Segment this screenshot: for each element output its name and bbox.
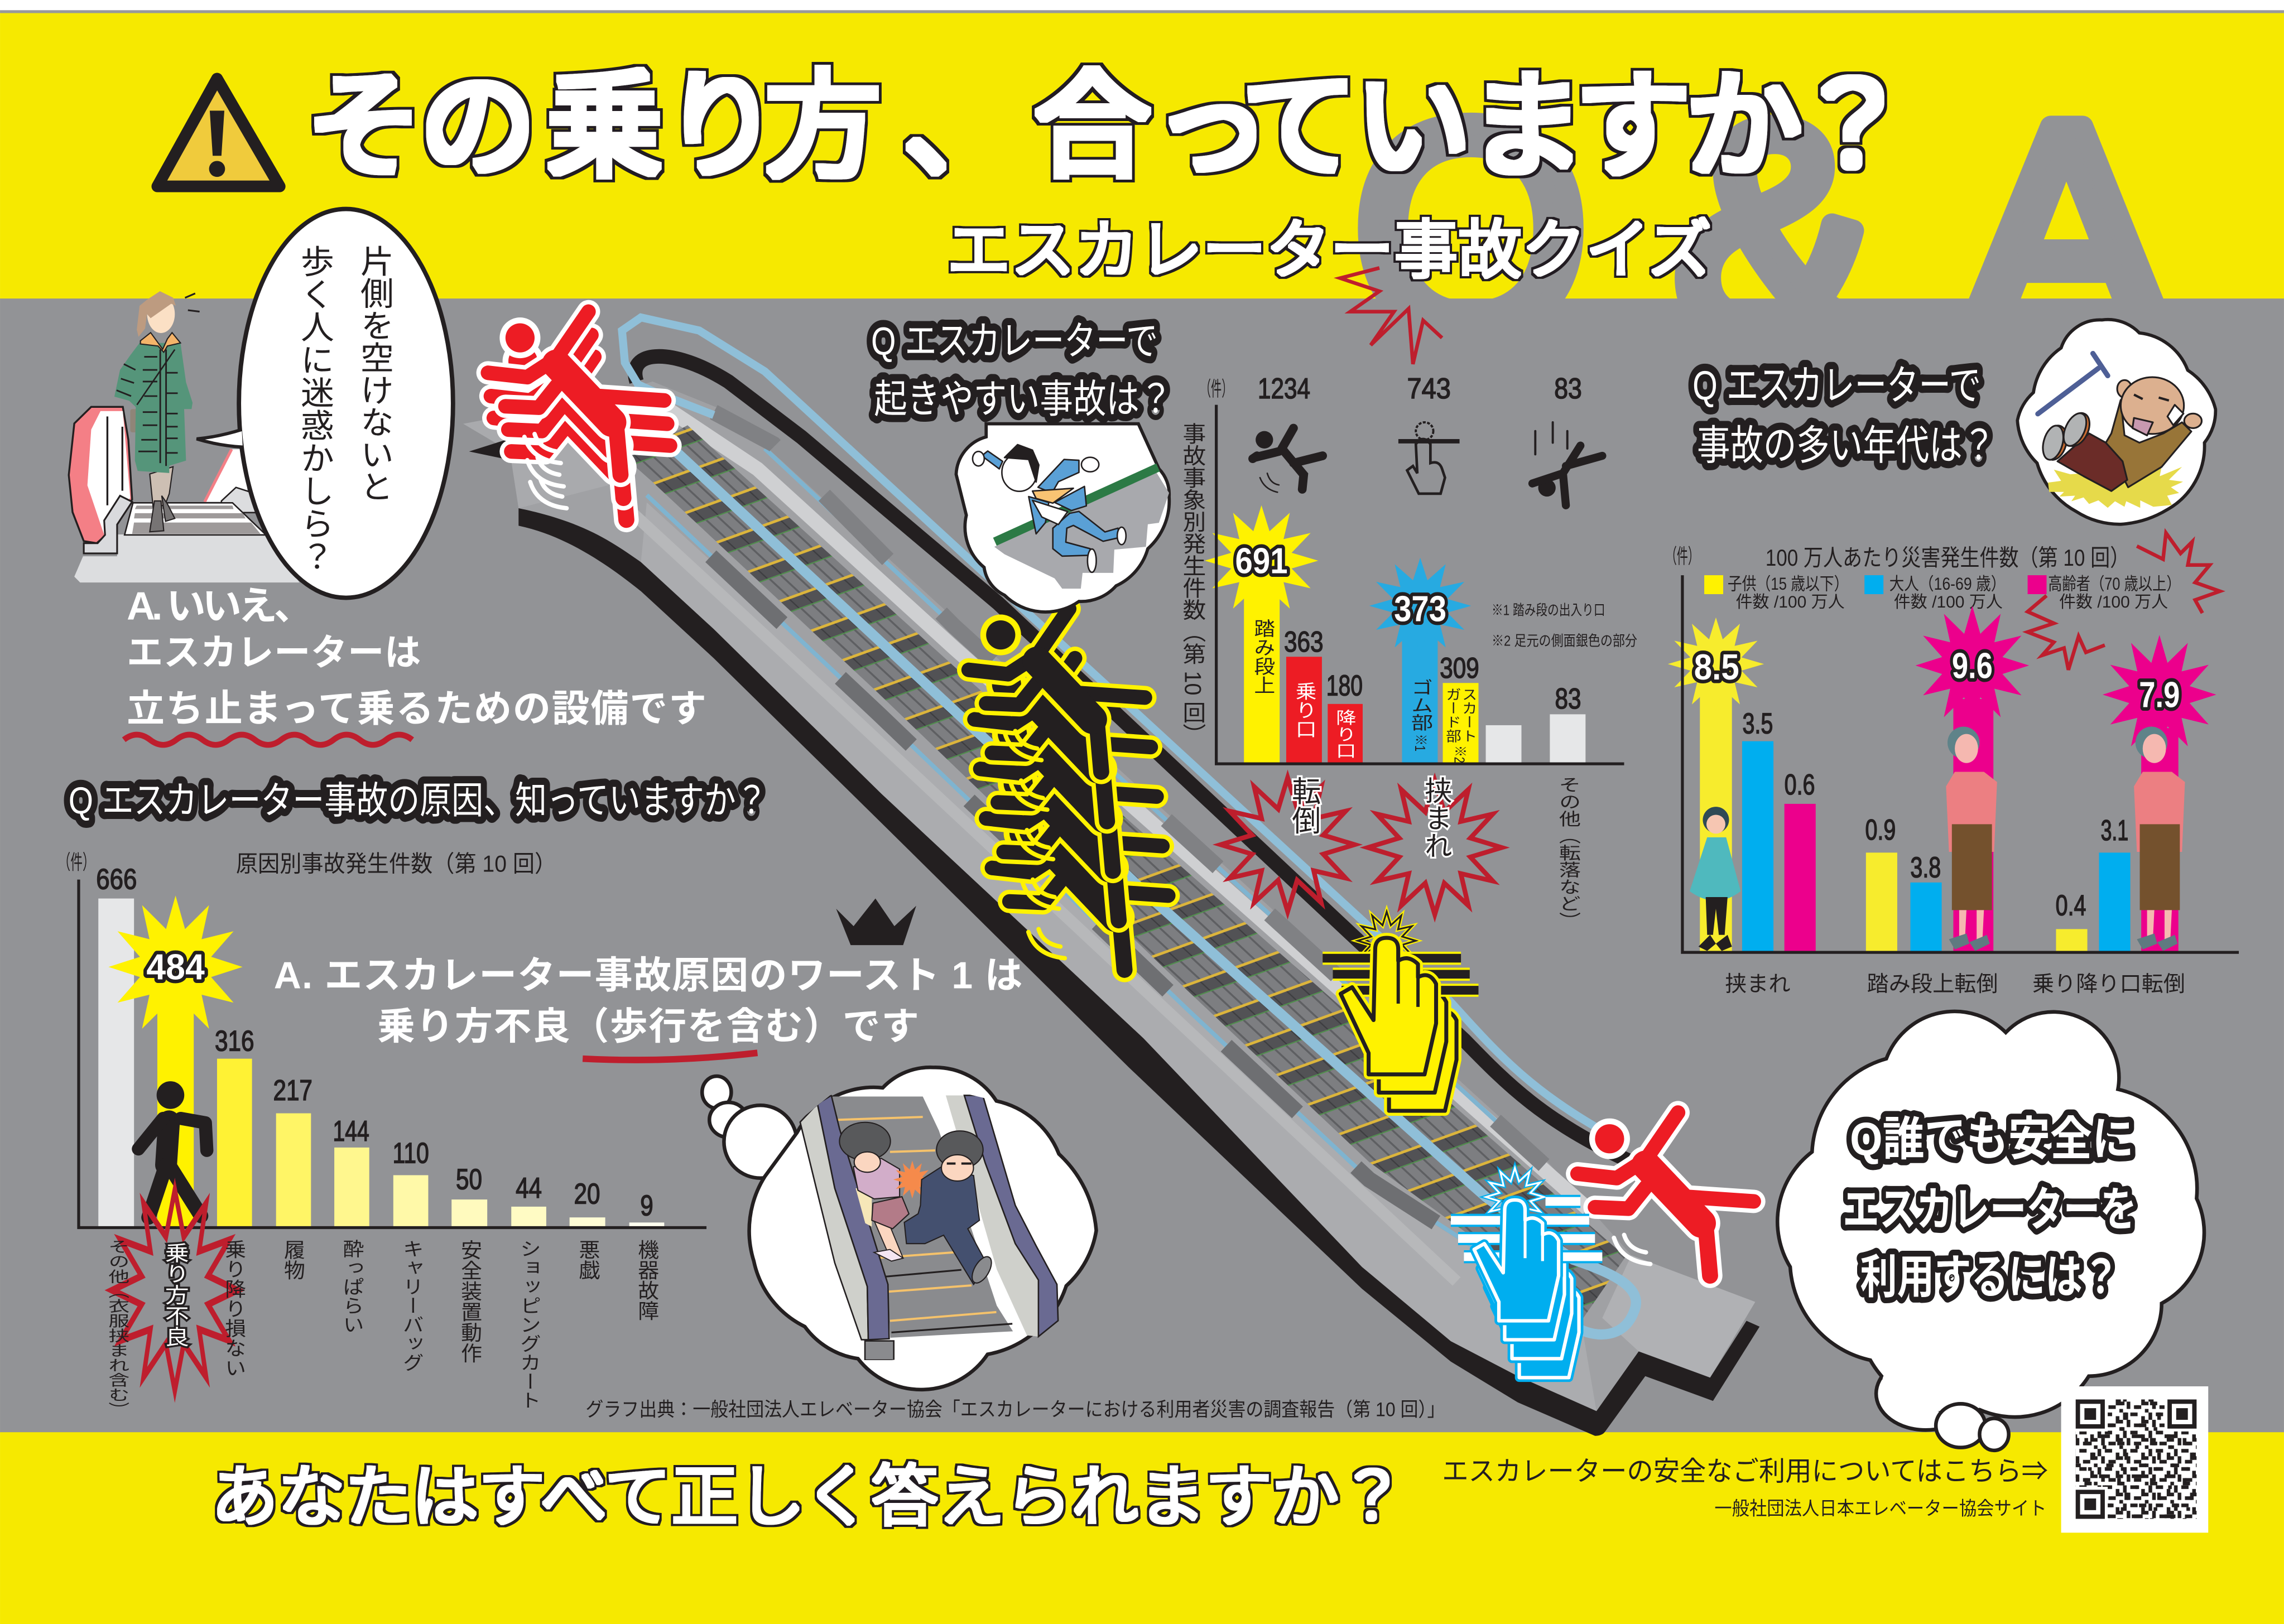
icon: crown: [836, 899, 916, 945]
footer link text: 一般社団法人日本エレベーター協会サイト: [1714, 1498, 2046, 1519]
bar values: 3.8: [1910, 852, 1941, 884]
red burst right top: [2137, 533, 2220, 613]
vertical title: 事故事象別発生件数（第 10 回）: [1180, 422, 1206, 745]
footer link text: [1442, 1457, 2048, 1519]
axes: [79, 880, 706, 1227]
boots: [150, 496, 175, 532]
title: その乗り方、合っていますか？: [306, 62, 1911, 192]
speech tail: [196, 430, 243, 447]
coat lines: [117, 349, 177, 466]
bar values: 0.6: [1785, 769, 1815, 801]
category labels: 挟まれ: [1421, 776, 1452, 859]
far balustrade: [205, 449, 249, 502]
bar inner labels: ※2: [1451, 745, 1468, 763]
thought bubble: walking on escalator: [702, 1067, 1097, 1390]
impact star: [2048, 467, 2183, 508]
far newel: [222, 488, 270, 513]
value 7.9: 7.9: [2139, 674, 2180, 715]
bar chart: accident types: [1180, 373, 1637, 929]
subtitle: エスカレーター事故クイズ: [947, 215, 1711, 286]
bar inner labels: 乗り口: [1292, 682, 1316, 738]
illustration: woman at escalator entrance: [69, 291, 300, 582]
question heading: common accidents: Q エスカレーターで: [871, 319, 1158, 363]
values: [96, 864, 653, 1222]
axes: [1682, 575, 2239, 952]
bar inner labels: ※1: [1412, 734, 1429, 751]
left handrail: [818, 1095, 889, 1339]
axis labels: 履物: [280, 1239, 304, 1280]
thought bubble: fallen old man: [2017, 320, 2215, 524]
axis labels: キャリーバッグ: [399, 1239, 422, 1372]
red burst right lower: [2028, 596, 2105, 670]
right skirt: [946, 1095, 1038, 1337]
upper light strip: [661, 405, 1588, 1209]
base: [865, 1341, 894, 1360]
totals: 743: [1407, 373, 1451, 405]
alert marks: [185, 293, 200, 312]
escalator body: [510, 382, 1755, 1411]
legend: 件数 /100 万人: [2059, 593, 2168, 611]
question heading: cause: Q エスカレーター事故の原因、知っていますか？: [69, 780, 768, 822]
totals: 83: [1554, 373, 1582, 405]
bar inner labels: [1251, 619, 1477, 763]
values: 316: [215, 1025, 254, 1057]
thick handrail: [656, 432, 1636, 1334]
icon: falling person: [1532, 422, 1602, 505]
thought bubble: safe use: 利用するには？: [1860, 1251, 2119, 1303]
bars: [98, 899, 664, 1227]
man passenger: [904, 1131, 996, 1286]
icon: walking person: [138, 1081, 207, 1217]
footnotes: ※2 足元の側面銀色の部分: [1492, 633, 1637, 649]
grey floor: [994, 470, 1169, 589]
watermark Q&A: Q&A: [1355, 62, 2167, 396]
bubble dots: [1876, 1357, 1975, 1430]
main grey area: [0, 298, 2284, 1433]
value 8.5: 8.5: [1694, 647, 1739, 687]
category labels: [1725, 972, 2185, 996]
burst 691: [1205, 505, 1318, 616]
values: 20: [574, 1178, 600, 1210]
landing arrow: [469, 434, 525, 463]
icon: red falling figures top: [488, 312, 670, 520]
answer: worst cause: [274, 955, 1022, 1060]
category labels: 転倒: [1287, 776, 1321, 835]
red burst near subtitle: [1340, 268, 1442, 364]
speech text: 片側を空けないと: [355, 245, 393, 503]
old man: [2040, 377, 2201, 491]
icon: woman two: [2134, 727, 2185, 951]
bubble body: [1777, 1011, 2204, 1417]
icon: child: [1690, 807, 1740, 951]
legend: 件数 /100 万人: [1736, 593, 1845, 611]
hair: [137, 291, 176, 337]
red burst around label: [112, 1190, 238, 1391]
man: [973, 445, 1126, 572]
near balustrade: [69, 407, 132, 553]
icon: woman one: [1946, 727, 1997, 951]
steps: [831, 1097, 1013, 1338]
icon: blue hand: [1451, 1168, 1602, 1377]
axis labels: 悪戯: [575, 1239, 599, 1280]
category labels: 乗り降り口転倒: [2032, 972, 2185, 996]
star impact: [893, 1160, 931, 1198]
icon: trapped finger: [1398, 422, 1460, 494]
bubble dots: [702, 1076, 731, 1108]
values: 44: [516, 1172, 542, 1204]
values: 144: [333, 1115, 369, 1148]
thought bubble: stumbling man: [956, 424, 1169, 612]
value 9.6: 9.6: [1952, 645, 1993, 686]
lower light strip: [634, 514, 1456, 1281]
bar values: 363: [1284, 626, 1323, 658]
answer: escalator standing: 立ち止まって乗るための設備です: [127, 688, 706, 730]
QR code: [2061, 1386, 2208, 1533]
bars: [1244, 575, 1585, 763]
lower rail with plates: [647, 495, 1573, 1310]
axis labels: 乗り方不良: [161, 1242, 189, 1347]
legend: 高齢者（70 歳以上）: [2048, 574, 2181, 594]
footer link text: エスカレーターの安全なご利用についてはこちら⇒: [1442, 1457, 2048, 1487]
right handrail: [964, 1095, 1058, 1337]
speech bubble: 歩く人に迷惑かしら？: [296, 245, 333, 572]
legend: 大人（16-69 歳）: [1889, 574, 2006, 594]
bubble body: [749, 1067, 1097, 1390]
top rule: [0, 10, 2284, 13]
bar values: 83: [1555, 683, 1581, 715]
values: 666: [96, 864, 137, 896]
bar chart: age groups: [1666, 544, 2239, 996]
category labels: 挟まれ: [1725, 972, 1791, 996]
legs: [150, 467, 173, 510]
values: 217: [273, 1074, 312, 1107]
bar values: [1742, 707, 2128, 922]
red burst: trapped: [1368, 780, 1502, 914]
burst 7.9: [2103, 635, 2216, 754]
source note: グラフ出典：一般社団法人エレベーター協会「エスカレーターにおける利用者災害の調査報告（第 10 回）」: [585, 1399, 1445, 1420]
axis labels: 乗り降り損ない: [222, 1239, 246, 1377]
thought bubble: safe use: エスカレーターを: [1843, 1183, 2137, 1236]
lower deck: [641, 503, 1597, 1411]
scene: [800, 1095, 1058, 1360]
woman: [114, 291, 200, 532]
footnotes: [1492, 602, 1637, 649]
answer: escalator standing: A. いいえ、: [127, 584, 313, 628]
lower black band: [518, 508, 1759, 1436]
chart title: 原因別事故発生件数（第 10 回）: [236, 850, 556, 876]
bar values: 3.1: [2101, 815, 2128, 847]
bar values: 180: [1326, 669, 1363, 702]
icon: slipping person: [1253, 428, 1323, 492]
strap: [137, 349, 175, 405]
legend: [1704, 574, 2181, 611]
bar inner labels: 踏み段上: [1251, 619, 1275, 695]
red squiggle underline: [124, 735, 412, 745]
footnotes: ※1 踏み段の出入り口: [1492, 602, 1605, 619]
category labels: その他（転落など）: [1556, 776, 1581, 929]
question heading: common accidents: [871, 319, 1172, 421]
red burst: fall: [1220, 778, 1355, 912]
burst 9.6: [1916, 606, 2029, 725]
step edges: [837, 1117, 996, 1321]
axes: [1216, 405, 1624, 764]
axis labels: ショッピングカート: [516, 1239, 540, 1410]
question heading: age group: Q エスカレーターで: [1692, 363, 1981, 408]
values: 9: [640, 1189, 653, 1222]
left skirt: [800, 1104, 868, 1339]
legend: 件数 /100 万人: [1894, 593, 2003, 611]
upper rail with plates: [714, 412, 1544, 1165]
footer band: [0, 1432, 2284, 1624]
chart title: 100 万人あたり災害発生件数（第 10 回）: [1766, 544, 2129, 571]
bar inner labels: スカート: [1460, 687, 1477, 743]
legend: 子供（15 歳以下）: [1728, 574, 1848, 594]
icon: red falling figure bottom: [1578, 1112, 1754, 1276]
axis labels: 機器故障: [634, 1239, 658, 1321]
icon: warning triangle: [157, 79, 280, 186]
axis labels: その他（衣服挟まれ含む）: [105, 1239, 129, 1417]
answer: escalator standing: エスカレーターは: [127, 632, 421, 673]
totals: [1258, 373, 1582, 405]
footer heading: あなたはすべて正しく答えられますか？: [211, 1459, 1406, 1534]
bubble text: Q誰でも安全に: [1850, 1112, 2134, 1165]
bar values: 3.5: [1742, 707, 1773, 740]
answer: escalator standing: [124, 584, 706, 745]
bars: [1700, 686, 2179, 952]
upper black band: [635, 356, 1628, 1160]
face: [147, 295, 175, 333]
escalator steps: [626, 425, 1626, 1318]
answer: worst cause: A. エスカレーター事故原因のワースト 1 は: [274, 955, 1022, 996]
escalator illustration: [463, 317, 1759, 1436]
icon: yellow hand: [1323, 912, 1478, 1111]
header band: [0, 13, 2284, 299]
values: 50: [456, 1163, 482, 1196]
cane: [2038, 354, 2108, 414]
unit: （件）: [1666, 545, 1699, 568]
question heading: age group: [1692, 363, 1996, 468]
totals: 1234: [1258, 373, 1310, 405]
answer: worst cause: 乗り方不良（歩行を含む）です: [377, 1006, 919, 1048]
values: 110: [393, 1137, 429, 1169]
highlighted burst 484: [108, 895, 243, 1038]
unit: （件）: [58, 851, 95, 874]
bar inner labels: 降り口: [1333, 709, 1356, 759]
bar values: 0.4: [2056, 890, 2086, 922]
collar: [141, 332, 180, 352]
bar inner labels: ゴム部: [1408, 678, 1432, 731]
axis labels: 酔っぱらい: [339, 1239, 363, 1334]
woman passenger: [839, 1122, 909, 1261]
category labels: 踏み段上転倒: [1867, 972, 1998, 996]
axis labels: 安全装置動作: [458, 1239, 481, 1363]
question heading: age group: 事故の多い年代は？: [1697, 423, 1996, 468]
speech bubble: [196, 209, 453, 598]
thought bubble: safe use: [1777, 1011, 2204, 1450]
platform: [74, 534, 300, 582]
question heading: common accidents: 起きやすい事故は？: [874, 377, 1172, 421]
green handrail: [995, 468, 1158, 542]
coat: [114, 343, 193, 473]
axis labels: [105, 1239, 658, 1417]
bar values: 309: [1440, 652, 1479, 685]
burst 8.5: [1668, 618, 1764, 711]
bar inner labels: ガード部: [1444, 687, 1461, 743]
icon: black yellow falling figures: [969, 609, 1168, 970]
value 484: 484: [146, 947, 205, 987]
bag: [130, 409, 139, 432]
top landing: [463, 415, 641, 508]
bar values: [1284, 626, 1581, 715]
bar values: 0.9: [1865, 814, 1896, 846]
red underline: [583, 1053, 757, 1060]
value 691: 691: [1235, 540, 1288, 581]
burst 373: [1369, 558, 1471, 654]
entrance steps: [124, 503, 266, 535]
category labels: [1287, 776, 1581, 929]
looped outer handrail: [622, 317, 1617, 1139]
value 373: 373: [1394, 589, 1446, 629]
unit: （件）: [1200, 377, 1232, 400]
lower landing plate: [1602, 1255, 1755, 1377]
bar chart: causes: [58, 850, 706, 1417]
